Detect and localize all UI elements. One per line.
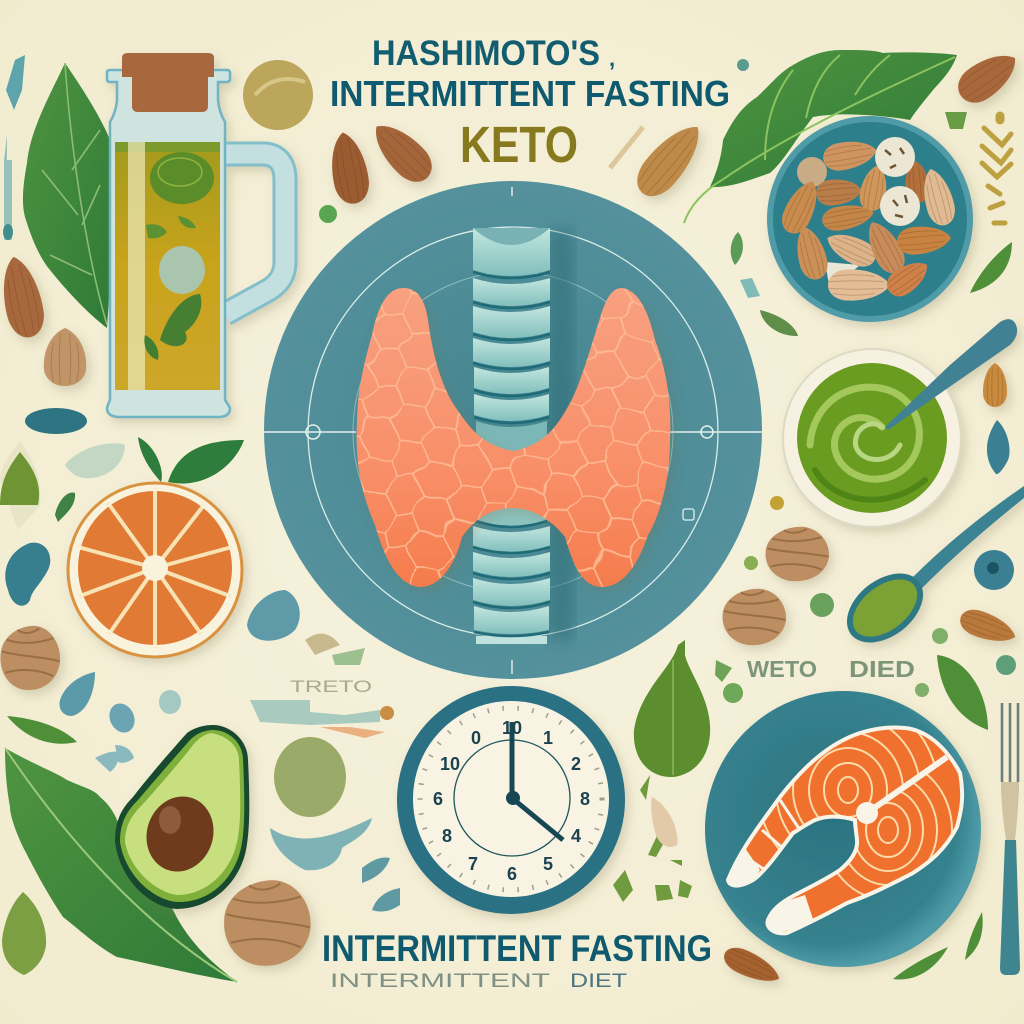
bottle liquid bbox=[115, 142, 220, 390]
clock numerals: 2 bbox=[571, 754, 581, 774]
clock numerals: 0 bbox=[471, 728, 481, 748]
illustration: clock bbox=[397, 686, 625, 914]
illustration: thyroid gland bbox=[356, 288, 678, 592]
clock numerals: 6 bbox=[507, 864, 517, 884]
illustration: left tall leaf bbox=[23, 63, 112, 328]
illustration: olive coin bbox=[243, 60, 313, 130]
illustration: glass bottle of green tea bbox=[107, 53, 285, 417]
heading: intermittent fasting: INTERMITTENT FASTING bbox=[322, 928, 712, 969]
title bbox=[330, 34, 730, 173]
clock numerals: 4 bbox=[571, 826, 581, 846]
faded text: intermittent diet: INTERMITTENT bbox=[330, 971, 551, 992]
icon: clock hands bbox=[512, 722, 563, 840]
illustration: avocado half bbox=[115, 725, 249, 909]
title: KETO bbox=[460, 116, 578, 173]
faded text: keto diet: DIED bbox=[849, 656, 915, 682]
clock numerals: 7 bbox=[468, 854, 478, 874]
clock numerals: 8 bbox=[580, 789, 590, 809]
title: INTERMITTENT FASTING bbox=[330, 73, 730, 114]
clock numerals: 5 bbox=[543, 854, 553, 874]
illustration: gold chevron sprig bbox=[982, 116, 1011, 223]
clock numerals: 10 bbox=[440, 754, 460, 774]
faded text: keto diet bbox=[747, 656, 915, 682]
illustration: orange slice bbox=[68, 437, 244, 657]
title: HASHIMOTO'S bbox=[372, 34, 600, 73]
salmon skin outline bbox=[728, 728, 962, 933]
bottle glass body bbox=[107, 70, 230, 417]
clock numerals: 10 bbox=[502, 718, 522, 738]
orange fruit bbox=[68, 483, 242, 657]
panel: central teal disc bbox=[264, 181, 762, 679]
icon: puree spoon bbox=[885, 319, 1017, 430]
clock numerals: 8 bbox=[442, 826, 452, 846]
illustration: teal sprig bbox=[3, 55, 25, 240]
clock numerals: 1 bbox=[543, 728, 553, 748]
thyroid cell mosaic bbox=[356, 288, 670, 587]
illustration: teal pebbles and beads bbox=[5, 408, 1014, 772]
illustration: beige seed bbox=[651, 797, 677, 847]
illustration: salmon plate bbox=[705, 691, 981, 967]
clock numerals: 6 bbox=[433, 789, 443, 809]
icon: cork bbox=[122, 53, 214, 112]
icon: orange leaves bbox=[138, 437, 244, 484]
faded text: TRETO: TRETO bbox=[290, 677, 372, 696]
faded text: intermittent diet: DIET bbox=[570, 971, 628, 992]
salmon backbone bbox=[867, 757, 947, 813]
illustration: spoon with green powder bbox=[834, 486, 1024, 657]
faded text: keto diet: WETO bbox=[747, 656, 817, 682]
clock numerals bbox=[433, 718, 590, 884]
faded text: intermittent diet bbox=[330, 971, 628, 992]
icon: fork bbox=[1000, 703, 1020, 975]
illustration: bottom-left leaf bbox=[5, 748, 237, 982]
illustration: tan stick near title bbox=[610, 127, 643, 168]
illustration: trachea bbox=[473, 228, 550, 644]
illustration: bowl of green puree bbox=[783, 319, 1017, 527]
illustration: walnuts bbox=[0, 527, 829, 966]
illustration: faded ghost elements bbox=[65, 443, 400, 912]
illustration: bowl of nuts bbox=[767, 116, 973, 322]
illustration: top-right leaf bbox=[684, 50, 957, 223]
icon: bottle handle bbox=[225, 154, 285, 314]
salmon flesh stripes bbox=[730, 730, 953, 932]
title: , bbox=[609, 46, 615, 71]
